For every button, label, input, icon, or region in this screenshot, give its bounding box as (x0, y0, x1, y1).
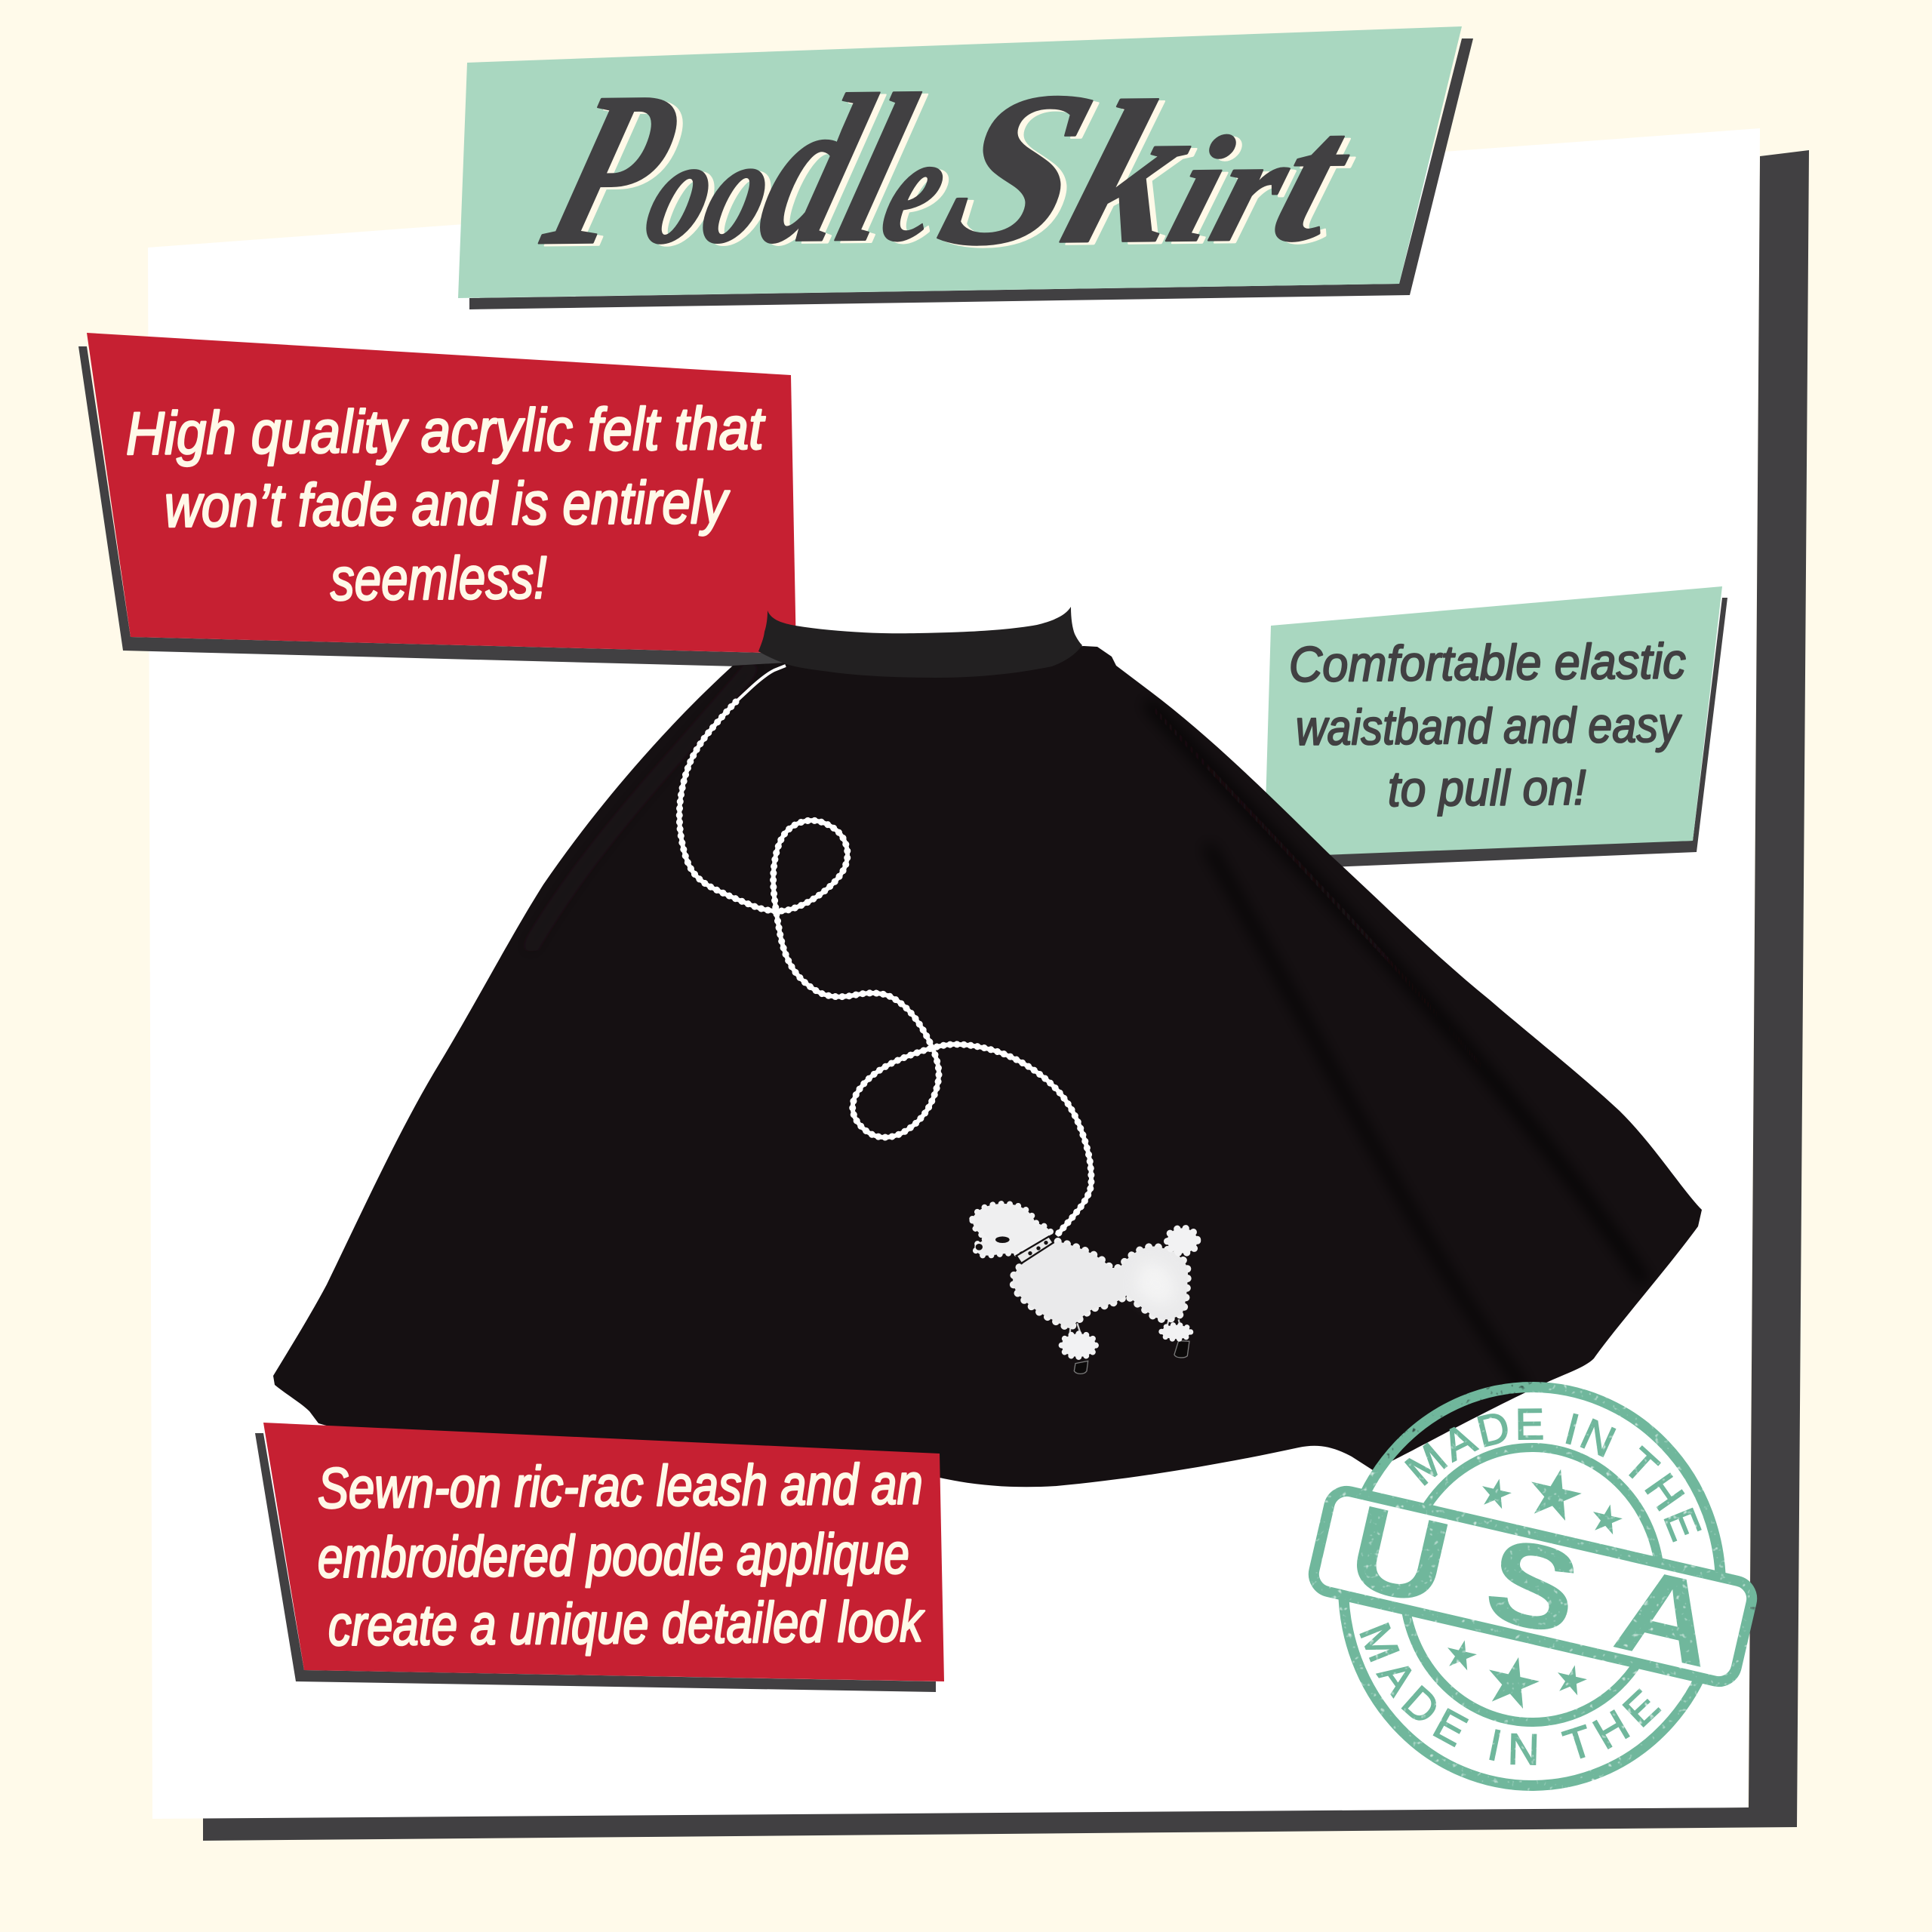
callout text: acrylic felt: seemless! (330, 543, 547, 613)
made in the USA stamp (1309, 1382, 1757, 1791)
skirt body (273, 646, 1702, 1487)
title banner (458, 26, 1473, 309)
callout text: leash and applique: embroidered poodle applique (318, 1522, 909, 1590)
poodle applique (972, 1204, 1198, 1374)
ric-rac leash (679, 666, 1091, 1235)
callout: leash and applique (255, 1423, 944, 1692)
waistband (758, 607, 1082, 678)
poodle legs (1069, 1319, 1180, 1336)
callout text: acrylic felt (125, 395, 766, 613)
stamp stars (1444, 1463, 1625, 1711)
title text: Skirt (917, 44, 1384, 291)
poodle highlights (1134, 1262, 1175, 1304)
stamp inner ring (1404, 1447, 1660, 1722)
callout text: elastic waistband: Comfortable elastic (1288, 632, 1686, 692)
stamp arc text (1359, 1408, 1702, 1765)
poodle collar (1017, 1236, 1054, 1263)
poodle eye (995, 1236, 1010, 1243)
stamp outer ring (1343, 1387, 1721, 1786)
callout text: elastic waistband: waistband and easy (1295, 697, 1683, 755)
panel shadow (203, 150, 1809, 1841)
stamp arc text: MADE IN THE (1359, 1623, 1662, 1765)
skirt illustration (273, 607, 1702, 1487)
callout text: leash and applique: create a unique detailed look (328, 1589, 925, 1658)
poodle rear paw (1161, 1325, 1191, 1339)
callout: acrylic felt (78, 333, 796, 668)
poodle front paw (1062, 1334, 1096, 1357)
white panel (148, 128, 1760, 1819)
stamp USA band: USA (1337, 1479, 1728, 1693)
callout text: leash and applique (318, 1452, 925, 1658)
title text (521, 44, 1390, 294)
callout text: elastic waistband (1288, 632, 1686, 817)
stamp arc text: MADE IN THE (1404, 1408, 1702, 1543)
title text: Poodle (528, 46, 993, 294)
callout text: acrylic felt: won’t fade and is entirely (164, 469, 731, 540)
callout text: leash and applique: Sewn-on ric-rac leash and an (318, 1452, 923, 1521)
poodle head (972, 1204, 1051, 1256)
poodle tail puff (1168, 1228, 1198, 1254)
poodle body (1013, 1241, 1188, 1328)
callout text: elastic waistband: to pull on! (1387, 759, 1586, 817)
callout text: acrylic felt: High quality acrylic felt that (125, 395, 766, 467)
poodle boots (1074, 1341, 1189, 1374)
poodle nose (976, 1244, 983, 1251)
title text: Poodle (521, 44, 987, 291)
callout: elastic waistband (1264, 586, 1727, 869)
title text: Skirt (923, 46, 1390, 294)
